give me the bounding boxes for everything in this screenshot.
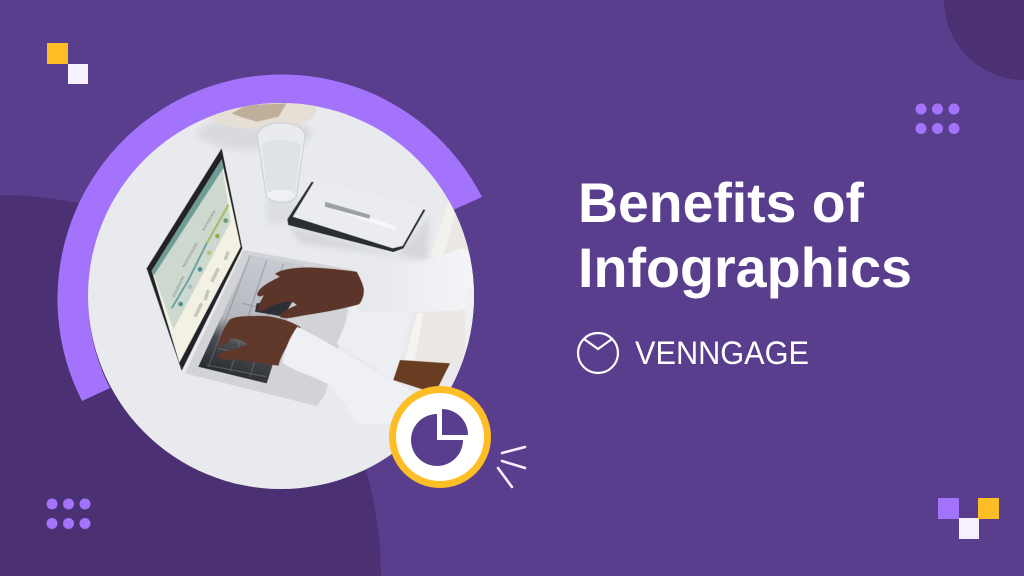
photo detail: laptop screen [147,148,242,371]
spark lines [498,447,525,487]
photo detail: upper hand [257,267,365,318]
photo detail: upper sleeve [357,248,473,313]
wordmark: VENNGAGE [635,335,809,371]
photo detail: trackpad and leg [336,330,464,390]
photo: hands typing on laptop [80,91,483,495]
photo detail: far sleeve edge [465,288,474,352]
title: Infographics [578,236,912,299]
dark quarter circle: bottom left [0,195,381,576]
photo detail: glass [257,123,305,223]
purple progress arc around photo [57,74,482,401]
photo detail: plate [199,103,317,150]
dots: bottom left [46,498,90,529]
logo: Venngage [578,333,809,373]
photo detail: laptop base [185,250,353,406]
dark quarter circle: top right [944,0,1024,80]
title [578,171,912,299]
photo detail: room behind table [404,198,474,363]
squares: bottom right [938,498,999,539]
photo detail: notebook and pen [287,180,430,260]
icon: pie chart [411,409,468,466]
title: Benefits of [578,171,864,234]
photo detail: lower sleeve [282,326,338,384]
dots: top right [916,104,960,134]
photo detail: lower hand [218,316,301,366]
chart badge [389,386,491,488]
icon: Venngage clock mark [578,333,618,373]
squares: top left [47,43,88,84]
